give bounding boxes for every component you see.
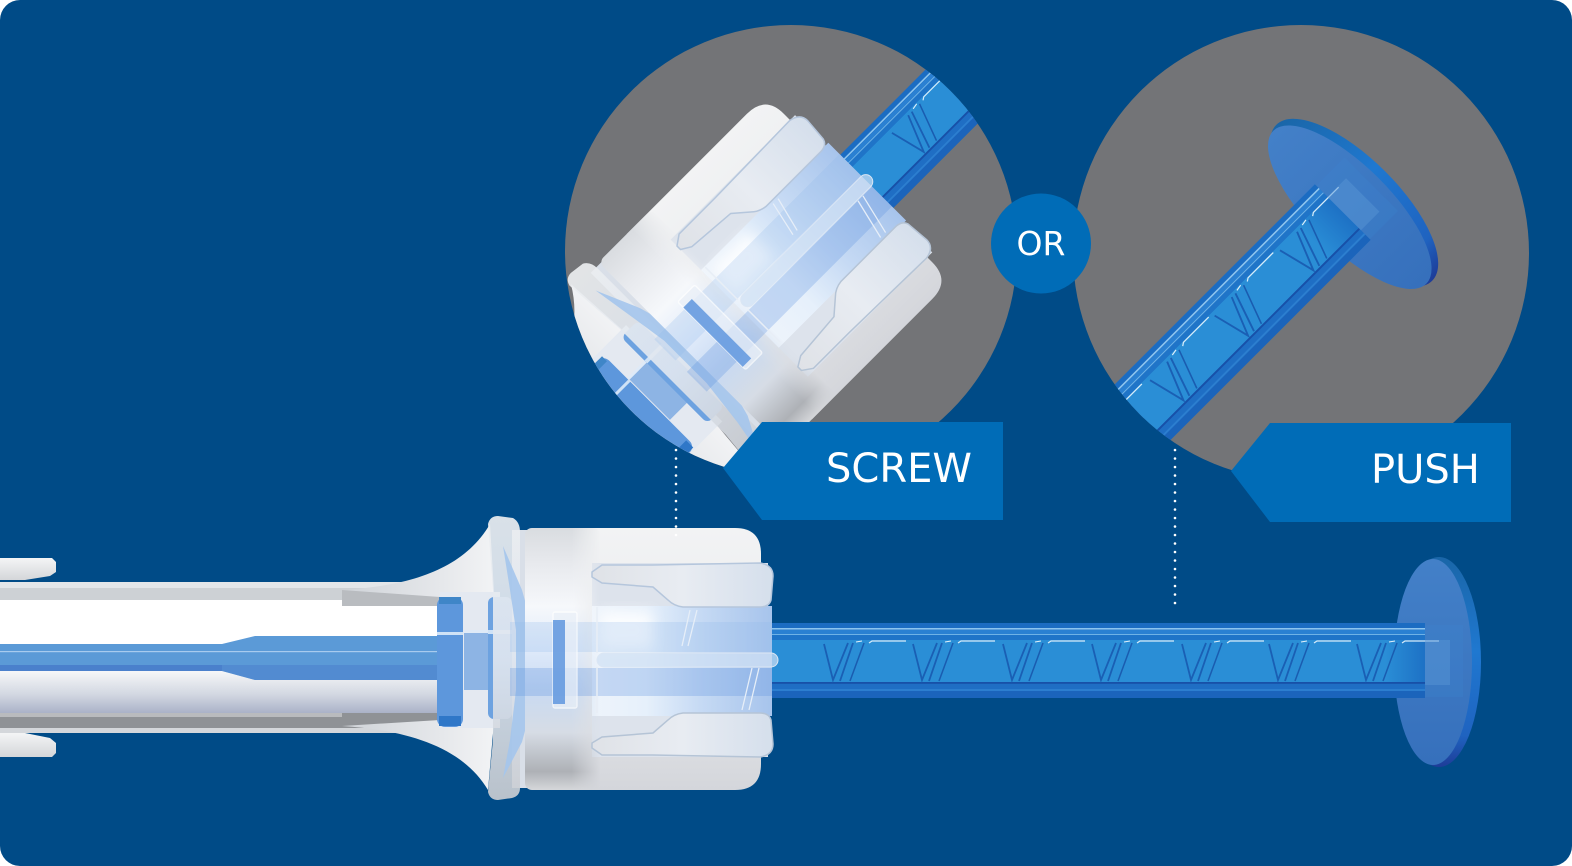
OR badge <box>991 194 1091 294</box>
label: PUSH <box>1231 423 1511 522</box>
label: SCREW <box>723 422 1003 520</box>
screw cap <box>510 528 778 790</box>
barrel flares <box>342 524 494 790</box>
label: SCREW: SCREW <box>826 446 972 492</box>
main syringe <box>0 516 1481 800</box>
inset circle: push <box>1074 25 1529 470</box>
inset circle: screw <box>565 25 1014 467</box>
plunger disc <box>1394 557 1481 767</box>
plunger rod <box>770 623 1463 698</box>
blue rings <box>437 592 512 728</box>
dotted line: push <box>1174 450 1176 611</box>
label: PUSH: PUSH <box>1371 447 1480 493</box>
flange <box>488 516 536 800</box>
inset: rotated cap close-up <box>568 70 1090 467</box>
dotted line: screw <box>675 450 677 540</box>
inset: rotated plunger close-up <box>1114 118 1438 440</box>
syringe barrel <box>0 558 440 757</box>
OR badge: OR <box>1017 224 1065 263</box>
